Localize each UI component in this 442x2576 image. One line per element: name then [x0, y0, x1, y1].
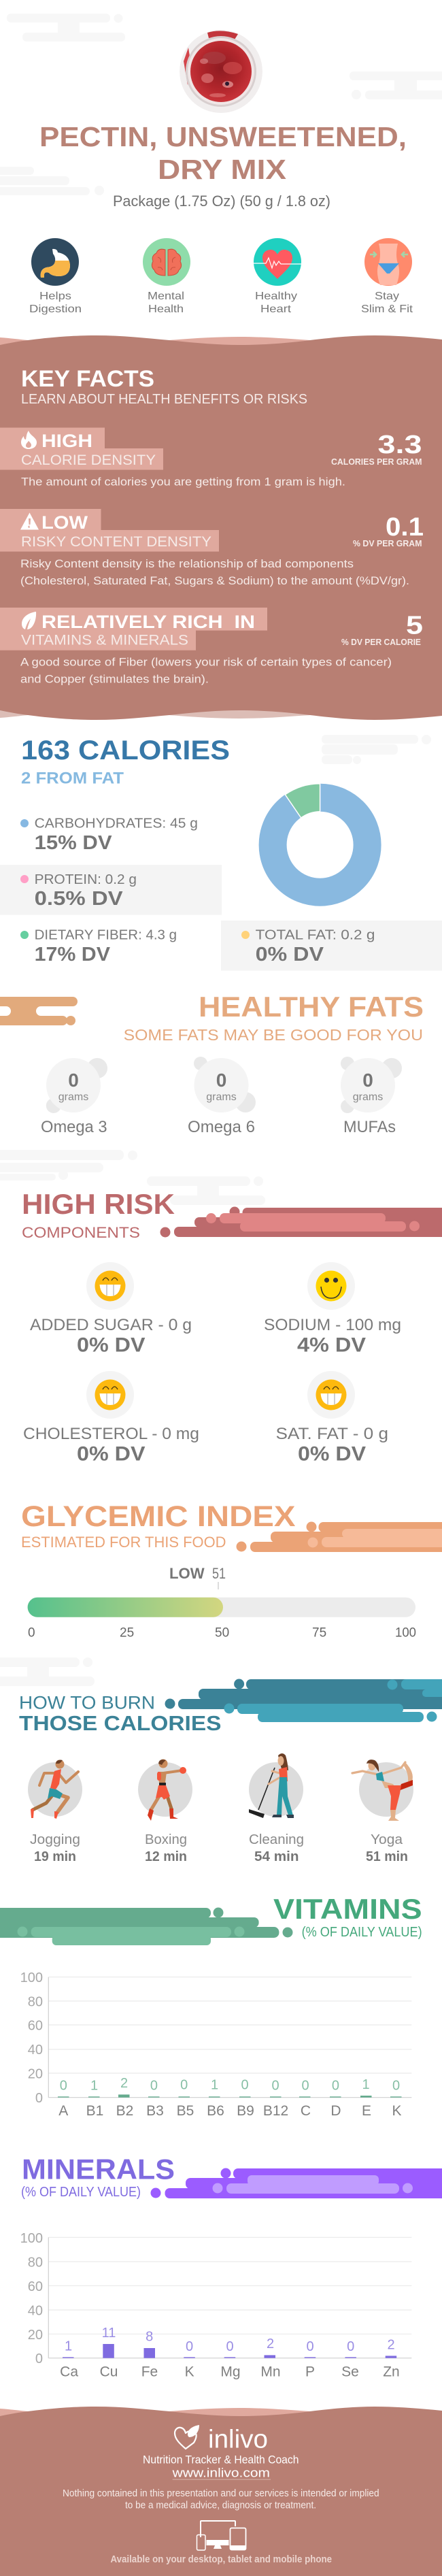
- label: helps digestion: Digestion: [29, 303, 82, 315]
- bar chart: vitamins: 0: [241, 2078, 249, 2093]
- heading: healthy fats: SOME FATS MAY BE GOOD FOR YOU: [124, 1026, 423, 1044]
- fact: relatively rich in vitamins and minerals: % DV PER CALORIE: [341, 637, 421, 647]
- fat: MUFAs: 0: [362, 1070, 373, 1091]
- bar chart: vitamins: 80: [28, 1995, 43, 2010]
- panel: healthy fats: [0, 991, 424, 1136]
- fact: relatively rich in vitamins and minerals: 5: [406, 612, 423, 640]
- risk: sodium: SODIUM - 100 mg: [264, 1316, 401, 1334]
- label: jogging: Jogging: [30, 1832, 80, 1847]
- bar chart: vitamins: B3: [146, 2103, 164, 2119]
- label: helps digestion: [29, 291, 82, 315]
- bar chart: minerals: P: [305, 2364, 315, 2380]
- legend: dietary fiber: DIETARY FIBER: 4.3 g: [35, 928, 177, 943]
- legend: protein: PROTEIN: 0.2 g: [35, 872, 137, 887]
- fact: calorie density: [0, 427, 422, 489]
- background clouds: [0, 14, 442, 1686]
- risk: added sugar: ADDED SUGAR - 0 g: [30, 1316, 192, 1334]
- bar chart: minerals: 0: [186, 2339, 193, 2354]
- fact: risky content density: [0, 509, 424, 587]
- panel: high risk components: [22, 1188, 442, 1466]
- label: boxing: [145, 1832, 187, 1864]
- bar chart: vitamins: B1: [86, 2103, 103, 2119]
- bar chart: minerals: Mg: [220, 2364, 241, 2380]
- tagline and website: Nutrition Tracker & Health Coach: [143, 2454, 299, 2466]
- fat: omega 6: [188, 1057, 256, 1136]
- risk: saturated fat: SAT. FAT - 0 g: [276, 1425, 388, 1443]
- heading: vitamins: (% OF DAILY VALUE): [302, 1925, 422, 1940]
- bar chart: minerals: 11: [102, 2326, 116, 2341]
- legend: carbohydrates: 15% DV: [35, 832, 112, 854]
- heading: healthy fats: [124, 991, 424, 1044]
- tagline and website: [143, 2454, 299, 2480]
- risk: cholesterol: 0% DV: [77, 1443, 146, 1466]
- bar chart: minerals: 100: [20, 2231, 43, 2246]
- bar chart: vitamins: B2: [116, 2103, 133, 2119]
- label: healthy heart: Healthy: [255, 291, 297, 302]
- heading: 163 calories: 2 FROM FAT: [21, 770, 124, 788]
- panel: key facts: [0, 335, 442, 720]
- bar chart: minerals: 2: [387, 2337, 395, 2352]
- panel: footer: [0, 2407, 442, 2576]
- risk: saturated fat: 0% DV: [298, 1443, 366, 1466]
- bar chart: minerals: Zn: [383, 2364, 400, 2380]
- fat: omega 3: grams: [58, 1091, 88, 1103]
- logo: inlivo: inlivo: [208, 2426, 268, 2454]
- fat: omega 3: Omega 3: [41, 1118, 107, 1136]
- bar chart: vitamins: B9: [237, 2103, 254, 2119]
- icon: stomach: [31, 238, 79, 286]
- tagline and website: www.inlivo.com: [172, 2466, 270, 2480]
- bar chart: vitamins: 40: [28, 2043, 43, 2058]
- bar chart: vitamins: 1: [211, 2078, 218, 2093]
- bar chart: minerals: 0: [347, 2339, 354, 2354]
- heading: key facts: KEY FACTS: [21, 366, 154, 392]
- label: jogging: [30, 1832, 80, 1864]
- legend: total fat: 0% DV: [256, 944, 324, 965]
- fact: risky content density: LOW: [41, 512, 88, 533]
- risk: sodium: 4% DV: [297, 1334, 366, 1357]
- fat: MUFAs: MUFAs: [343, 1118, 396, 1136]
- label: yoga: [366, 1832, 408, 1864]
- bar chart: vitamins: [20, 1970, 411, 2119]
- bar chart: minerals: 0: [226, 2339, 234, 2354]
- label: healthy heart: Heart: [260, 303, 292, 315]
- fact: risky content density: Risky Content density is the relationship of bad components: [20, 558, 354, 570]
- heading: minerals: MINERALS: [22, 2153, 175, 2185]
- legend: dietary fiber: [20, 928, 177, 965]
- bar chart: vitamins: 1: [90, 2079, 98, 2094]
- fat: MUFAs: grams: [353, 1091, 383, 1103]
- bar chart: minerals: 60: [28, 2279, 43, 2294]
- fact: risky content density: 0.1: [386, 513, 424, 542]
- activity: jogging: [28, 1760, 82, 1819]
- fat: MUFAs: [341, 1057, 402, 1136]
- bar chart: vitamins: 0: [392, 2079, 400, 2094]
- icon: brain: [143, 238, 190, 286]
- risk: cholesterol: CHOLESTEROL - 0 mg: [23, 1425, 199, 1443]
- bar chart: vitamins: 0: [271, 2079, 279, 2094]
- fact: risky content density: RISKY CONTENT DENSITY: [21, 534, 211, 550]
- icon: warning: [20, 513, 39, 529]
- bar chart: minerals: 40: [28, 2304, 43, 2319]
- label: boxing: Boxing: [145, 1832, 187, 1847]
- heading: glycemic index: GLYCEMIC INDEX: [21, 1500, 296, 1533]
- label: mental health: Health: [148, 303, 184, 315]
- bar chart: vitamins: 100: [20, 1970, 43, 1985]
- decorative blob: [160, 1207, 442, 1237]
- bar chart: minerals: [20, 2231, 411, 2380]
- bar chart: vitamins: 0: [332, 2079, 339, 2094]
- bar chart: vitamins: B5: [177, 2103, 194, 2119]
- bar chart: vitamins: K: [392, 2103, 402, 2119]
- gauge scale: 0: [28, 1626, 35, 1640]
- fact: risky content density: (Cholesterol, Saturated Fat, Sugars & Sodium) to the amount (%DV/gr).: [20, 575, 409, 587]
- decorative blob: [0, 1908, 292, 1945]
- gauge scale: 100: [395, 1626, 416, 1640]
- fact: relatively rich in vitamins and minerals: VITAMINS & MINERALS: [21, 633, 188, 648]
- bar chart: vitamins: 60: [28, 2018, 43, 2033]
- bar chart: vitamins: C: [301, 2103, 311, 2119]
- gauge scale: 50: [215, 1626, 229, 1640]
- bar chart: minerals: K: [185, 2364, 194, 2380]
- bar chart: vitamins: 0: [301, 2079, 309, 2094]
- heading: high risk: HIGH RISK: [22, 1188, 175, 1220]
- panel: glycemic index: [21, 1500, 442, 1640]
- decorative blob: [165, 1679, 442, 1722]
- food photo: jar of jam: [180, 30, 262, 113]
- title: PECTIN, UNSWEETENED,: [39, 121, 407, 152]
- label: mental health: Mental: [148, 291, 184, 302]
- gauge bar: [28, 1598, 415, 1617]
- bar chart: vitamins: 0: [150, 2079, 158, 2094]
- label: cleaning: 54 min: [254, 1849, 299, 1864]
- bar chart: minerals: Mn: [260, 2364, 281, 2380]
- bar chart: minerals: 20: [28, 2328, 43, 2343]
- bar chart: minerals: Cu: [100, 2364, 118, 2380]
- icon: leaf: [22, 612, 36, 629]
- bar chart: vitamins: E: [362, 2103, 371, 2119]
- logo: inlivo: [175, 2425, 268, 2454]
- fat: omega 6: 0: [216, 1070, 226, 1091]
- heading: how to burn: THOSE CALORIES: [19, 1711, 222, 1735]
- risk: added sugar: 0% DV: [77, 1334, 146, 1357]
- icon: flame: [21, 431, 37, 449]
- title: [39, 121, 407, 185]
- bar chart: vitamins: 20: [28, 2067, 43, 2082]
- bar chart: vitamins: B6: [207, 2103, 224, 2119]
- fat: omega 3: [41, 1058, 107, 1136]
- gauge scale: 75: [312, 1626, 326, 1640]
- heading: 163 calories: [21, 736, 230, 788]
- heading: 163 calories: 163 CALORIES: [21, 736, 230, 765]
- decorative blob: [151, 2168, 442, 2198]
- fact: calorie density: CALORIES PER GRAM: [331, 457, 422, 467]
- risk: saturated fat: [276, 1371, 388, 1466]
- legend: carbohydrates: CARBOHYDRATES: 45 g: [35, 816, 198, 831]
- decorative blob: [237, 1521, 442, 1552]
- legend: dietary fiber: 17% DV: [35, 944, 111, 965]
- bar chart: minerals: 2: [267, 2336, 274, 2351]
- icon: heart: [254, 238, 301, 286]
- label: stay slim and fit: [361, 291, 413, 315]
- fact: calorie density: 3.3: [378, 431, 422, 459]
- gauge scale: 25: [120, 1626, 134, 1640]
- panel: vitamins: [0, 1893, 422, 2119]
- risk: cholesterol: [23, 1371, 199, 1466]
- fat: omega 6: Omega 6: [188, 1118, 255, 1136]
- fact: relatively rich in vitamins and minerals: and Copper (stimulates the brain).: [20, 674, 209, 686]
- bar chart: vitamins: 0: [60, 2079, 67, 2094]
- benefits row: [29, 238, 413, 315]
- disclaimer: to be a medical advice, diagnosis or treatment.: [125, 2500, 316, 2511]
- bar chart: minerals: Ca: [60, 2364, 78, 2380]
- gauge label: LOW: [169, 1565, 205, 1582]
- fat: omega 3: 0: [68, 1070, 79, 1091]
- label: yoga: 51 min: [366, 1849, 408, 1864]
- fat: omega 6: grams: [206, 1091, 237, 1103]
- panel: how to burn those calories: [19, 1679, 442, 1864]
- legend: protein: 0.5% DV: [35, 888, 123, 910]
- gauge label: [169, 1565, 226, 1589]
- disclaimer: Nothing contained in this presentation and our services is intended or implied: [63, 2488, 379, 2499]
- heading: minerals: (% OF DAILY VALUE): [21, 2185, 141, 2200]
- heading: vitamins: VITAMINS: [273, 1893, 422, 1925]
- heading: high risk: COMPONENTS: [22, 1224, 140, 1241]
- icon: devices: [197, 2520, 246, 2550]
- bar chart: minerals: Se: [341, 2364, 359, 2380]
- bar chart: vitamins: 0: [180, 2078, 188, 2093]
- bar chart: minerals: 0: [35, 2351, 43, 2366]
- serving size: Package (1.75 Oz) (50 g / 1.8 oz): [113, 193, 330, 210]
- label: stay slim and fit: Slim & Fit: [361, 303, 413, 315]
- heading: key facts: LEARN ABOUT HEALTH BENEFITS OR RISKS: [21, 392, 307, 407]
- bar chart: vitamins: D: [330, 2103, 341, 2119]
- fact: relatively rich in vitamins and minerals: RELATIVELY RICH IN: [41, 612, 255, 632]
- label: stay slim and fit: Stay: [375, 291, 399, 302]
- heading: vitamins: [273, 1893, 422, 1940]
- fact: risky content density: % DV PER GRAM: [353, 538, 422, 548]
- risk: added sugar: [30, 1262, 192, 1357]
- legend: total fat: TOTAL FAT: 0.2 g: [256, 928, 375, 943]
- label: yoga: Yoga: [371, 1832, 403, 1847]
- activity: yoga: [352, 1760, 413, 1821]
- legend: carbohydrates: [20, 816, 198, 854]
- bar chart: vitamins: 1: [362, 2077, 370, 2092]
- heading: glycemic index: ESTIMATED FOR THIS FOOD: [21, 1534, 226, 1551]
- risk: sodium: [264, 1262, 401, 1357]
- activity: boxing: [138, 1760, 192, 1821]
- label: cleaning: [249, 1832, 304, 1864]
- bar chart: minerals: 0: [306, 2339, 314, 2354]
- panel: calories: [0, 736, 442, 971]
- heading: how to burn: [19, 1693, 222, 1735]
- decorative blob: [0, 997, 78, 1025]
- icon: slim waist: [364, 238, 412, 286]
- label: helps digestion: Helps: [39, 291, 71, 302]
- heading: minerals: [21, 2153, 175, 2200]
- bar chart: minerals: 80: [28, 2255, 43, 2270]
- heading: key facts: [21, 366, 307, 407]
- availability note: Available on your desktop, tablet and mobile phone: [110, 2554, 332, 2565]
- bar chart: minerals: 8: [146, 2330, 153, 2345]
- bar chart: minerals: 1: [65, 2339, 72, 2354]
- fact: calorie density: The amount of calories you are getting from 1 gram is high.: [21, 476, 345, 489]
- label: boxing: 12 min: [145, 1849, 187, 1864]
- fact: relatively rich in vitamins and minerals: [0, 608, 423, 686]
- legend: total fat: [221, 921, 442, 971]
- donut chart: [273, 784, 367, 892]
- heading: glycemic index: [21, 1500, 296, 1551]
- label: cleaning: Cleaning: [249, 1832, 304, 1847]
- bar chart: vitamins: A: [58, 2103, 68, 2119]
- label: mental health: [148, 291, 184, 315]
- disclaimer: [63, 2488, 379, 2511]
- gauge scale: [28, 1626, 416, 1640]
- fact: relatively rich in vitamins and minerals: A good source of Fiber (lowers your risk of certain types of cancer): [20, 657, 392, 669]
- panel: minerals: [20, 2153, 442, 2380]
- legend: protein: [0, 865, 222, 915]
- label: healthy heart: [255, 291, 297, 315]
- bar chart: minerals: Fe: [141, 2364, 158, 2380]
- heading: how to burn: HOW TO BURN: [19, 1693, 155, 1713]
- bar chart: vitamins: 2: [120, 2076, 128, 2091]
- fact: calorie density: HIGH: [41, 431, 92, 451]
- gauge label: 51: [212, 1565, 226, 1582]
- heading: high risk: [22, 1188, 175, 1241]
- bar chart: vitamins: 0: [35, 2091, 43, 2106]
- fact: calorie density: CALORIE DENSITY: [21, 452, 156, 468]
- heading: healthy fats: HEALTHY FATS: [199, 991, 424, 1023]
- activity: cleaning: [249, 1753, 303, 1818]
- title: DRY MIX: [158, 154, 286, 185]
- label: jogging: 19 min: [34, 1849, 76, 1864]
- bar chart: vitamins: B12: [263, 2103, 288, 2119]
